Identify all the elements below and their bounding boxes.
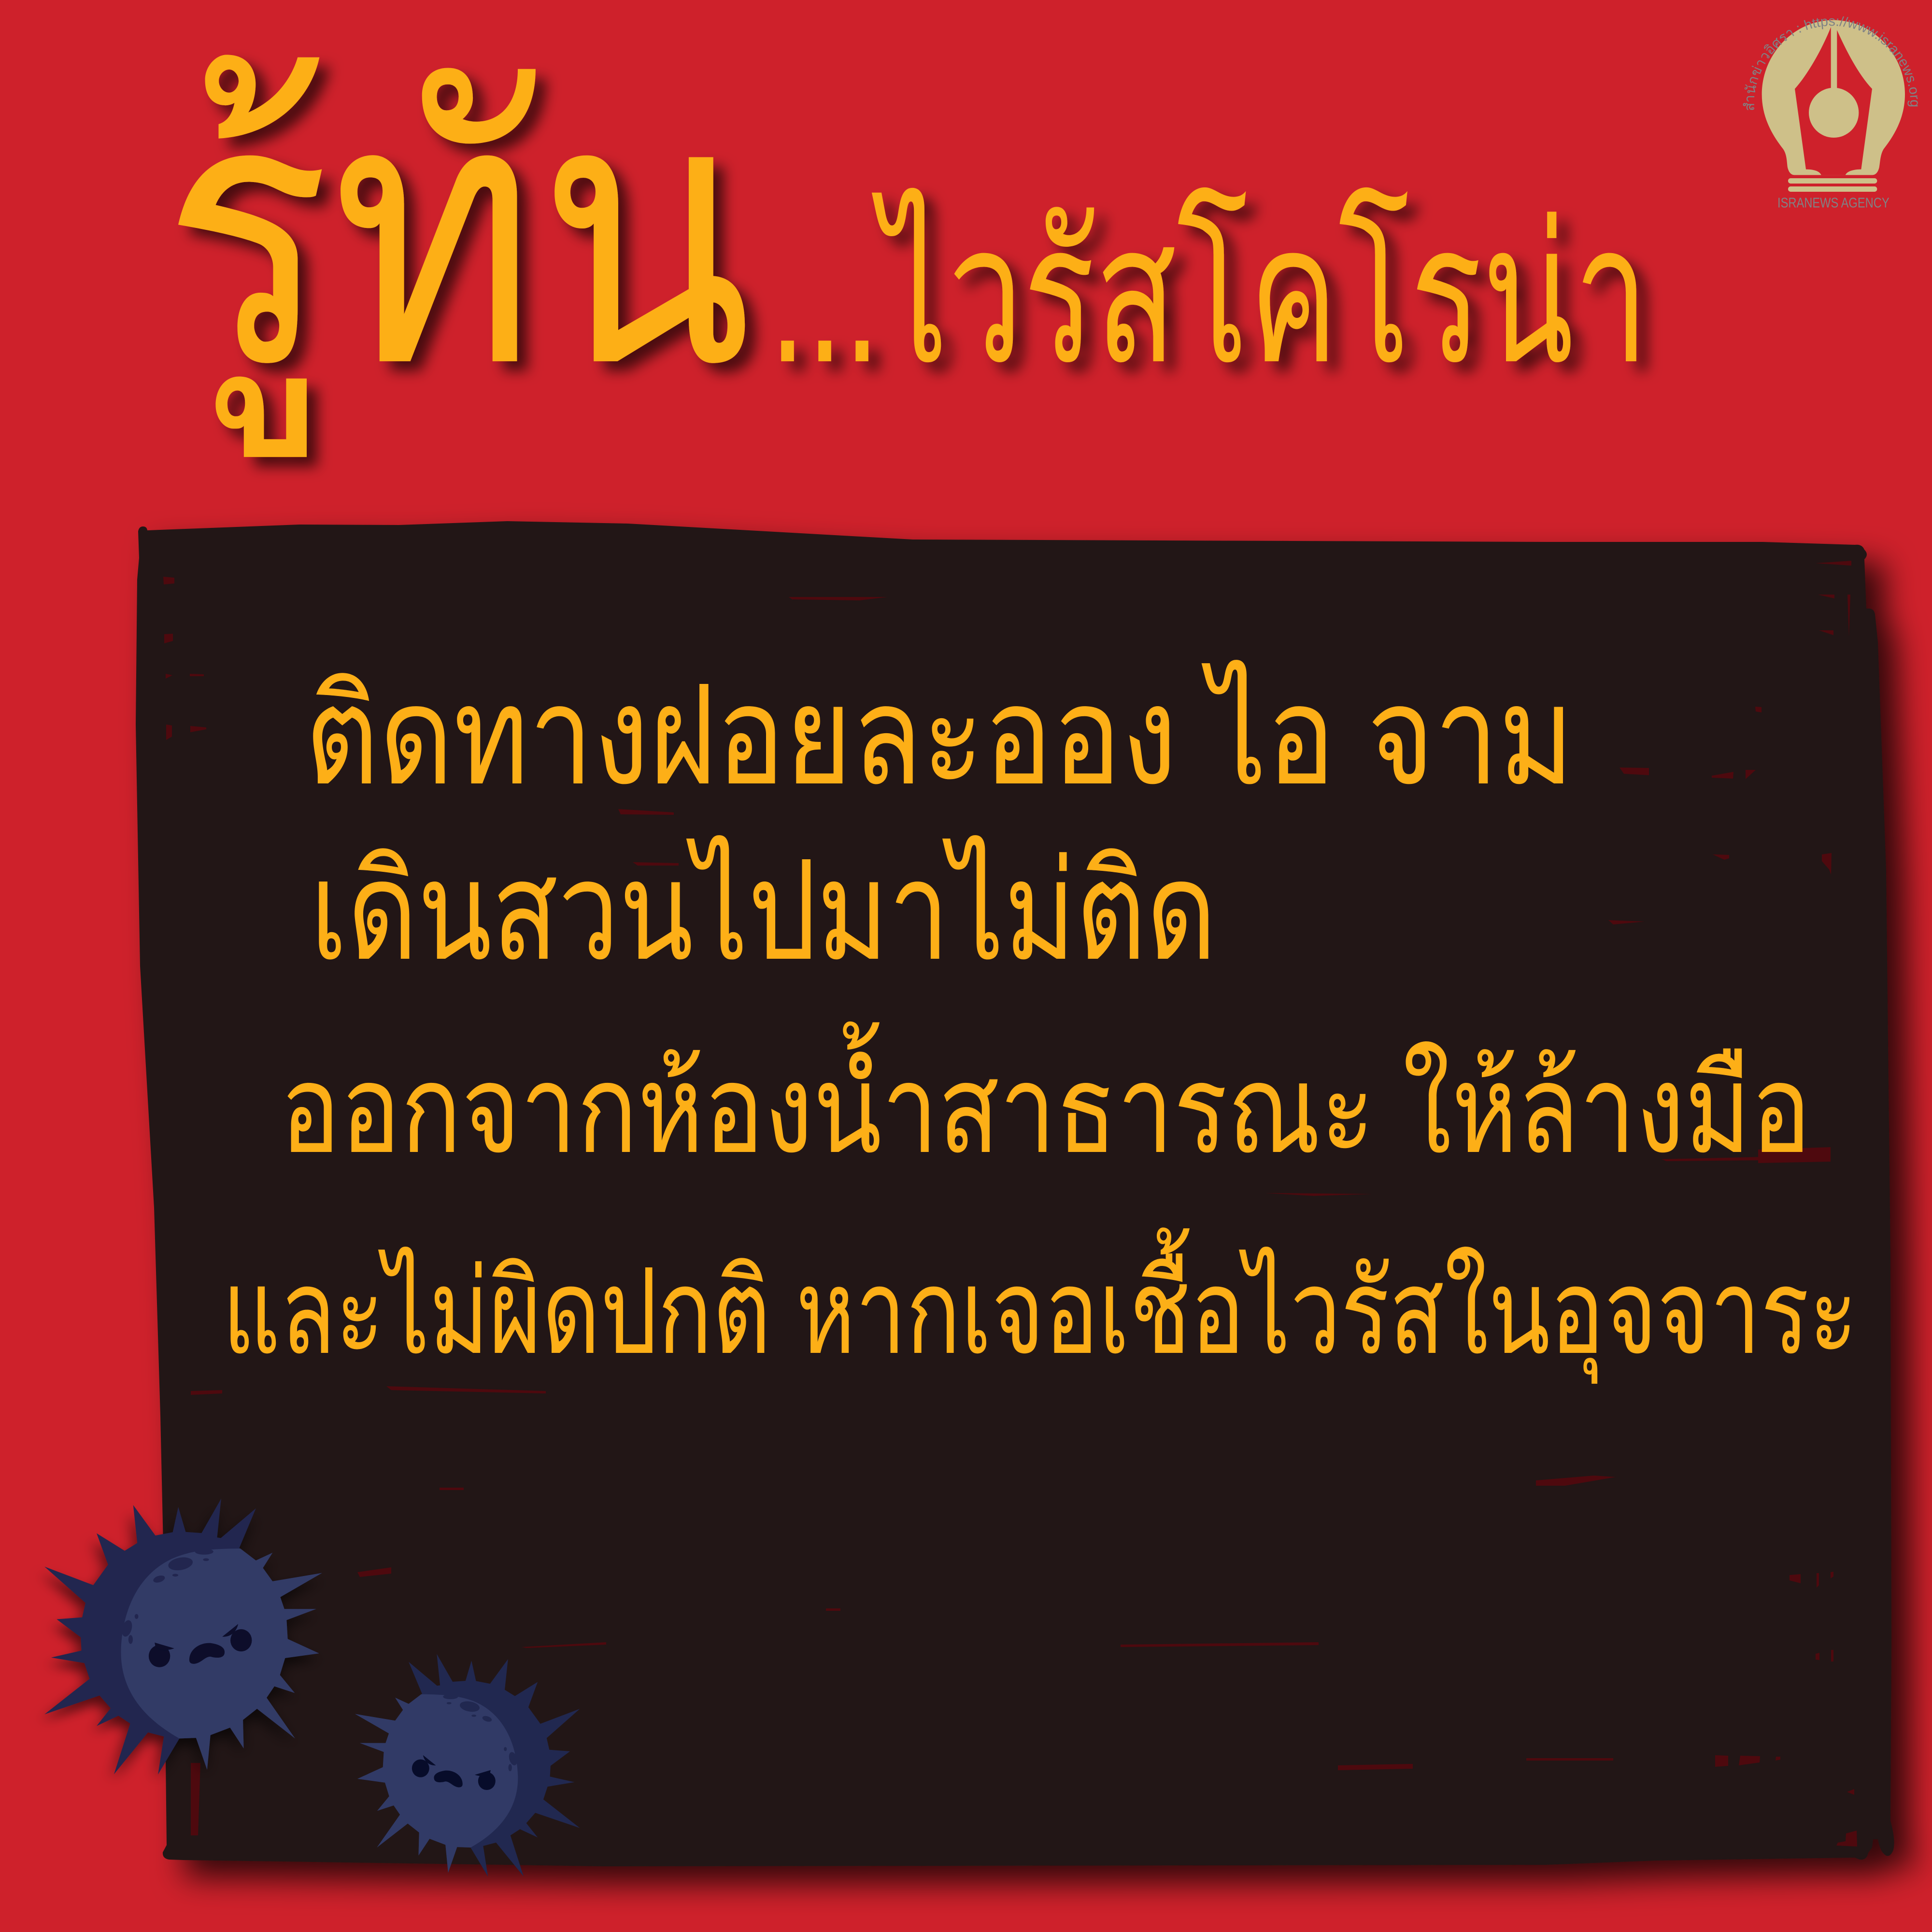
text line 1: ติดทางฝอยละออง ไอ จาม (305, 659, 1574, 813)
text line 2: เดินสวนไปมาไม่ติด (310, 834, 1217, 988)
logo: Isranews Agency (1743, 16, 1918, 211)
title (162, 29, 1649, 459)
logo: agency name: ISRANEWS AGENCY (1777, 195, 1889, 211)
title word: big: รู้ทัน (162, 29, 753, 459)
icon: small angry virus (355, 1654, 580, 1876)
panel: black scribble (136, 521, 1894, 1866)
logo: bulb with pen nib (1762, 20, 1905, 192)
body text (222, 659, 1858, 1384)
red scratch marks on panel (163, 561, 1857, 1847)
icon: large angry virus (44, 1499, 322, 1775)
logo: curved caption: สำนักข่าวอิศรา : https://www.isranews.org (1743, 16, 1918, 110)
